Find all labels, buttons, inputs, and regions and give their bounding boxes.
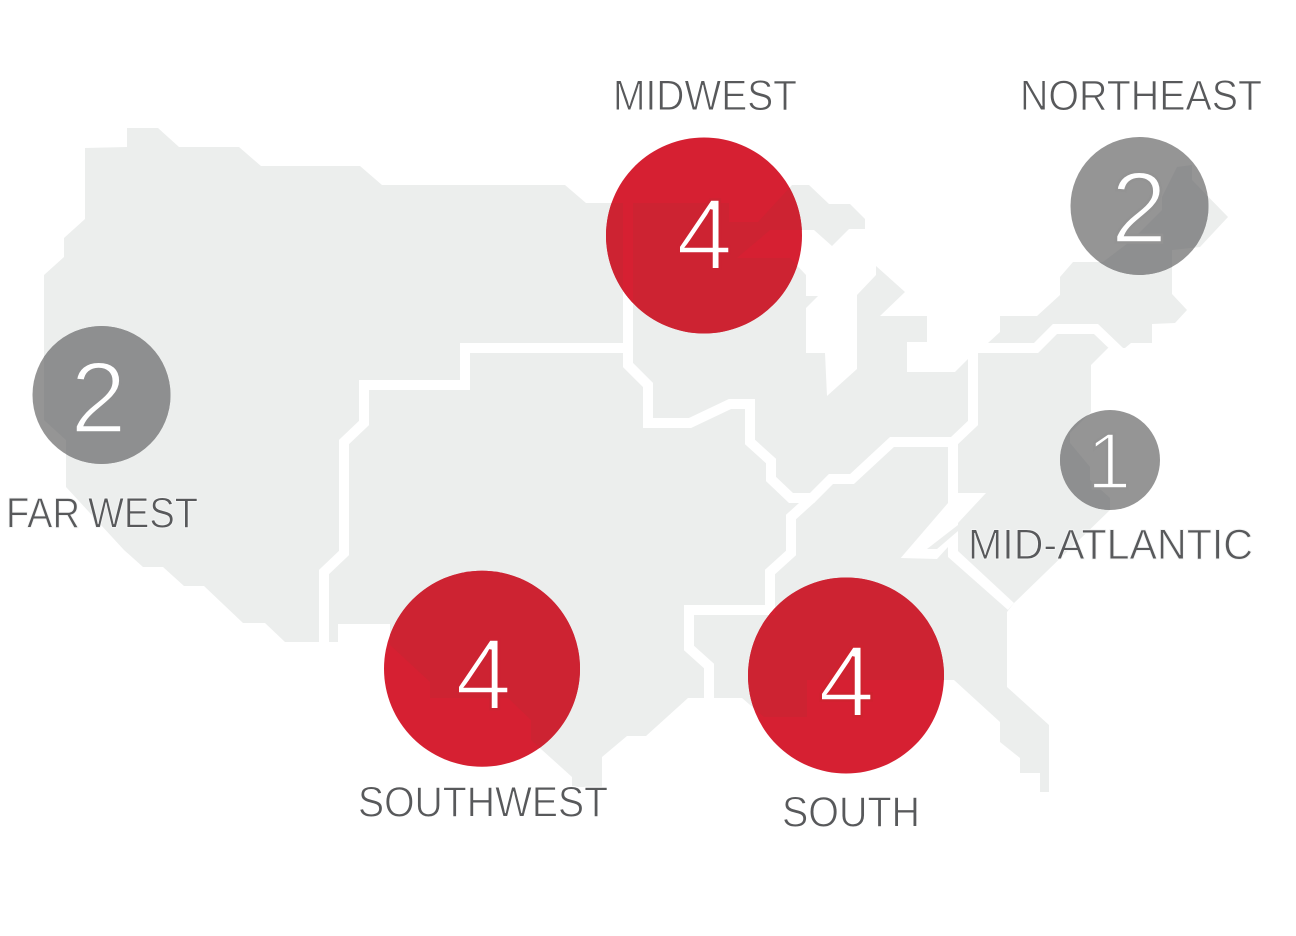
region: Far West: FAR WEST xyxy=(6,490,198,538)
region: Far West xyxy=(9,326,197,528)
region: Southwest: SOUTHWEST xyxy=(358,778,608,826)
region: Northeast: 2 xyxy=(1111,152,1167,264)
region: South: SOUTH xyxy=(782,788,920,836)
region: Northeast xyxy=(1024,80,1261,275)
region: Southwest xyxy=(360,570,607,816)
map: United States silhouette with region borders xyxy=(44,128,1228,792)
region: Far West: 2 xyxy=(70,342,127,454)
region: South: 4 xyxy=(818,626,875,738)
region: Mid-Atlantic xyxy=(972,410,1252,560)
region: Mid-Atlantic: MID-ATLANTIC xyxy=(968,521,1253,569)
region: Southwest: 4 xyxy=(455,620,512,732)
region: Northeast: NORTHEAST xyxy=(1020,72,1262,120)
region: Midwest: 4 xyxy=(676,180,733,292)
region: South xyxy=(748,578,944,826)
region: Midwest: MIDWEST xyxy=(613,72,797,120)
region: Mid-Atlantic: 1 xyxy=(1087,416,1131,506)
region: Midwest xyxy=(606,80,802,334)
